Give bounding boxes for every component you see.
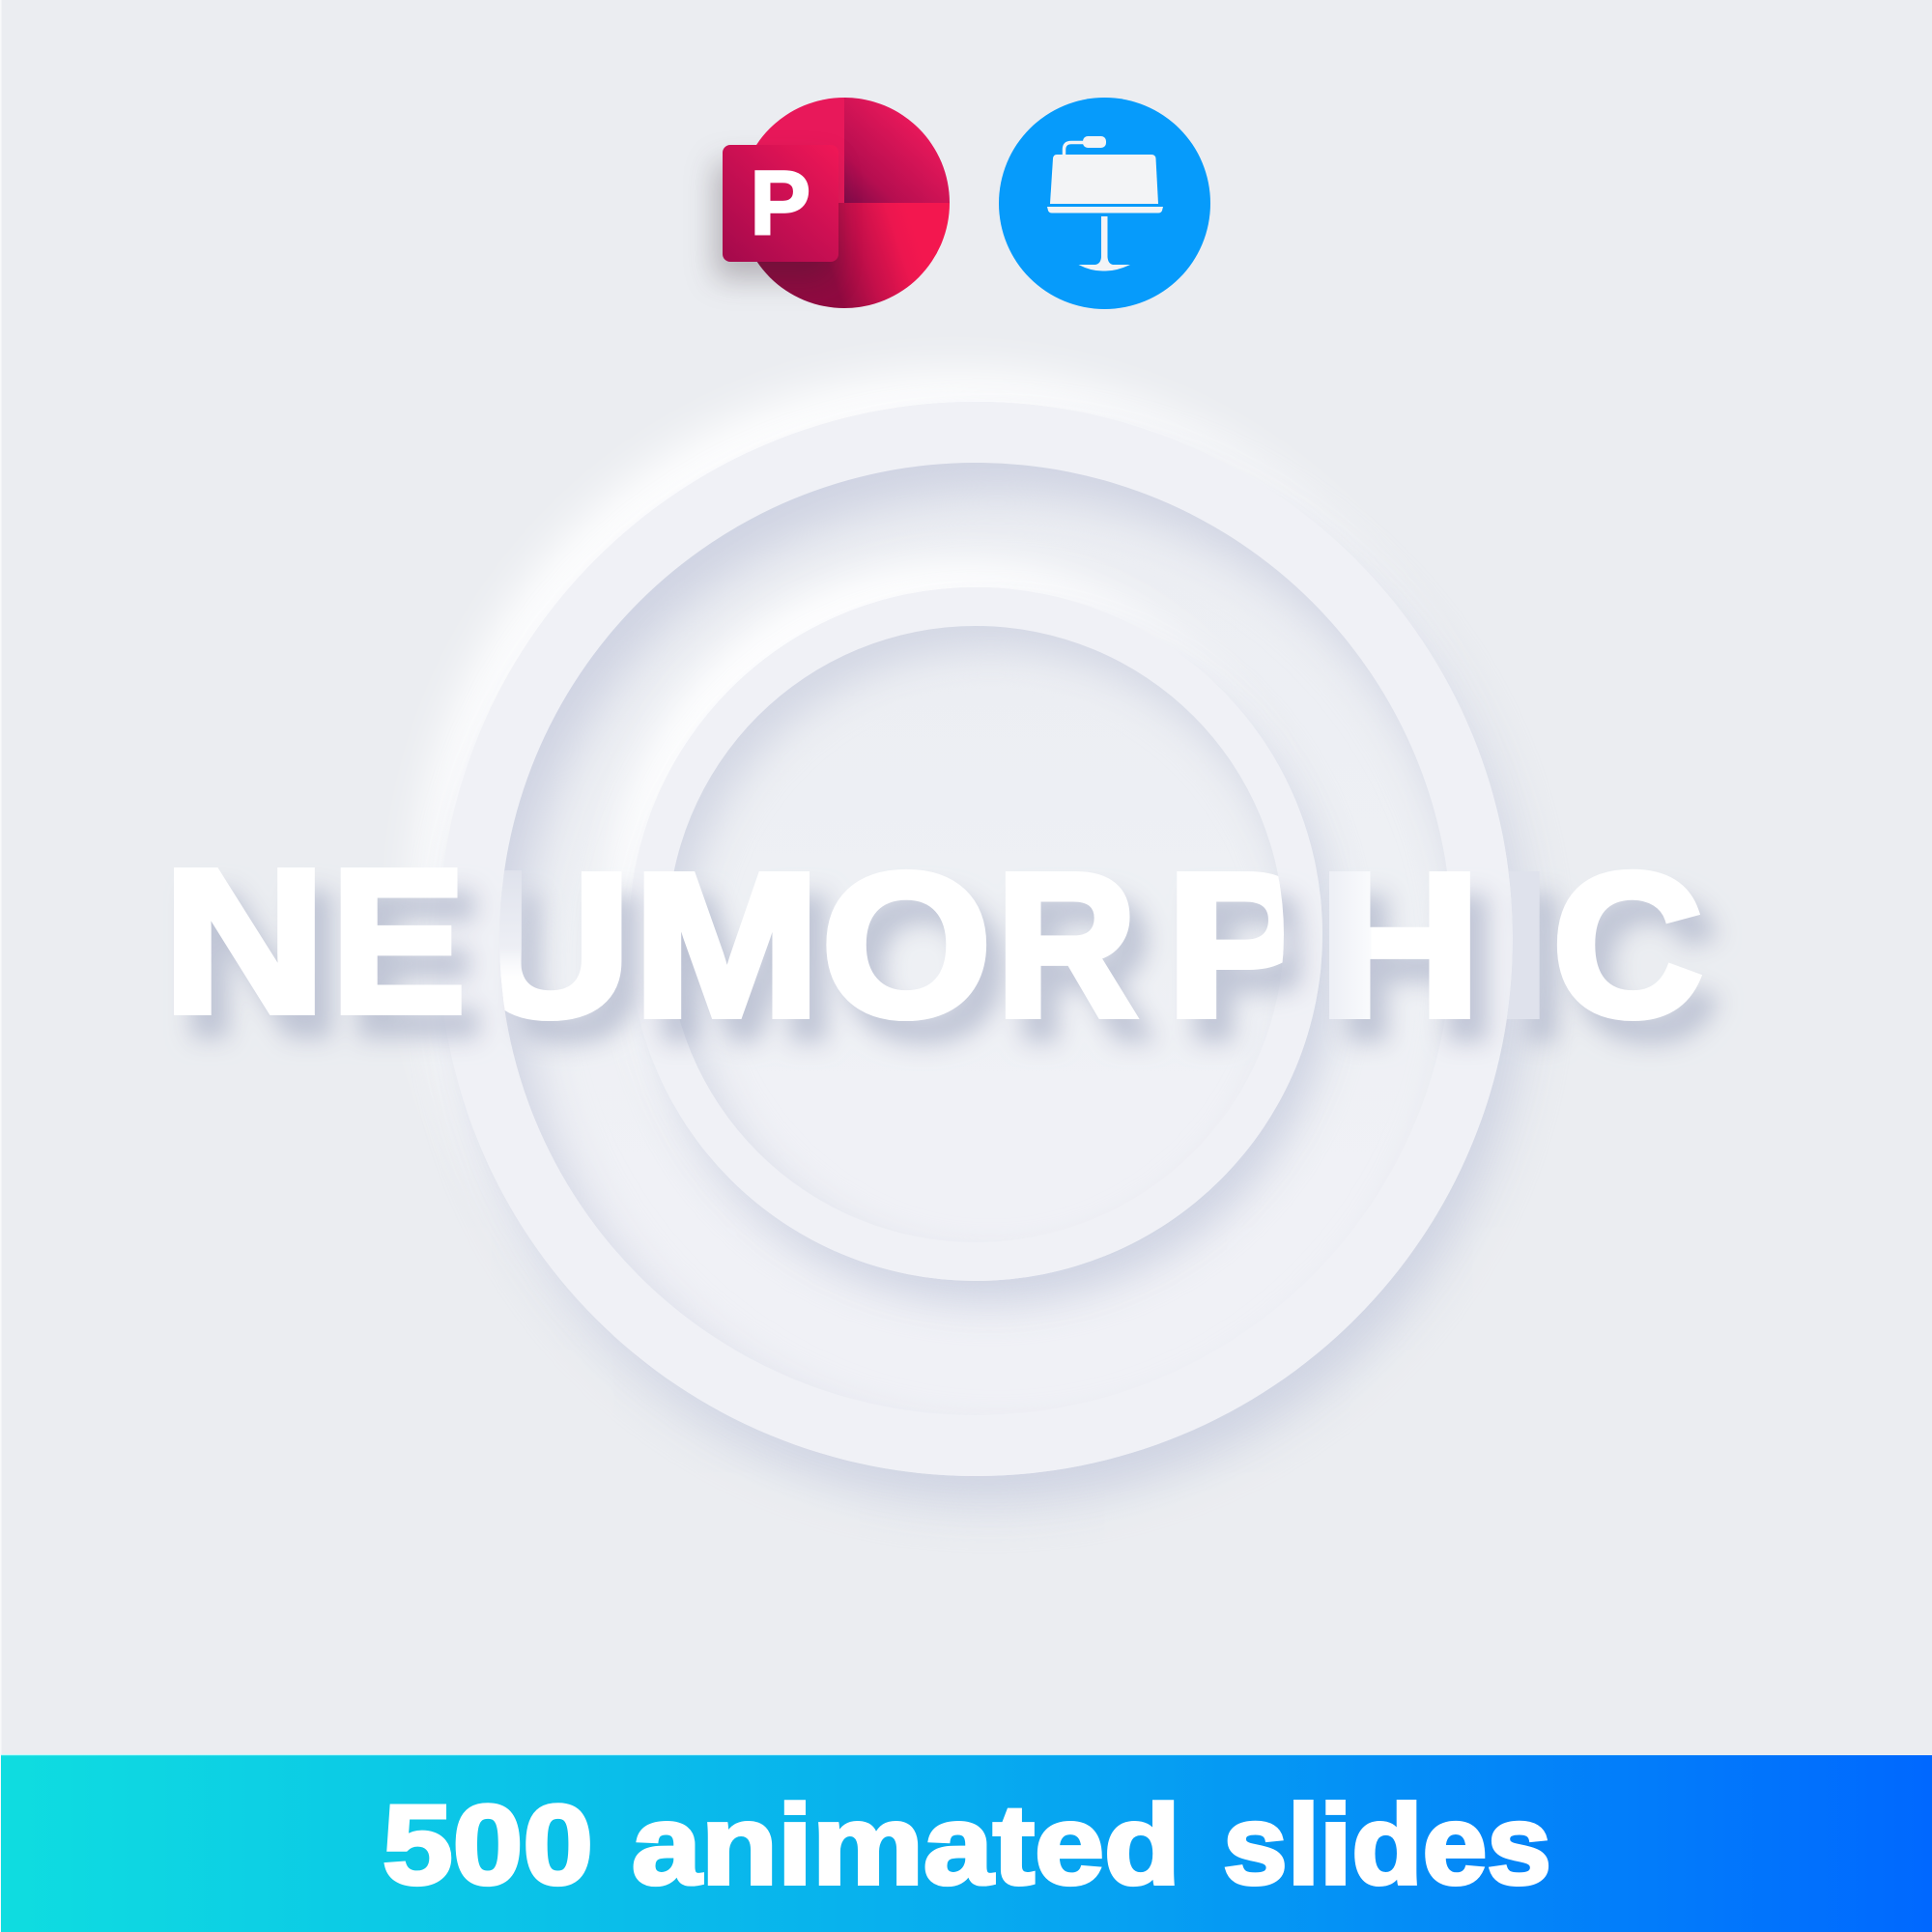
title: NEUMORPHIC: N [163, 828, 326, 1056]
banner text [383, 1781, 1551, 1908]
icon: PowerPoint [723, 97, 951, 309]
banner text: 500 [383, 1781, 593, 1908]
title: NEUMORPHIC [174, 867, 1723, 1055]
title: NEUMORPHIC: R [996, 831, 1137, 1059]
title: NEUMORPHIC: C [1552, 832, 1703, 1059]
shadow tint on letter U [499, 870, 522, 968]
title: NEUMORPHIC: P [1167, 832, 1312, 1059]
icon: PowerPoint: P [750, 152, 810, 253]
banner text: animated [632, 1781, 1180, 1908]
icon: Keynote [999, 98, 1210, 309]
banner text: slides [1223, 1781, 1551, 1908]
title: NEUMORPHIC: U [471, 831, 631, 1059]
title: NEUMORPHIC: H [1319, 832, 1481, 1060]
title: NEUMORPHIC: O [821, 832, 991, 1059]
title: NEUMORPHIC: I [1487, 831, 1550, 1059]
bottom banner [1, 1754, 1932, 1932]
title: NEUMORPHIC: M [634, 832, 820, 1060]
outer ring [415, 369, 1534, 1518]
neumorphic rings [415, 369, 1534, 1518]
title: NEUMORPHIC: E [331, 828, 466, 1055]
inner ring [613, 560, 1340, 1318]
